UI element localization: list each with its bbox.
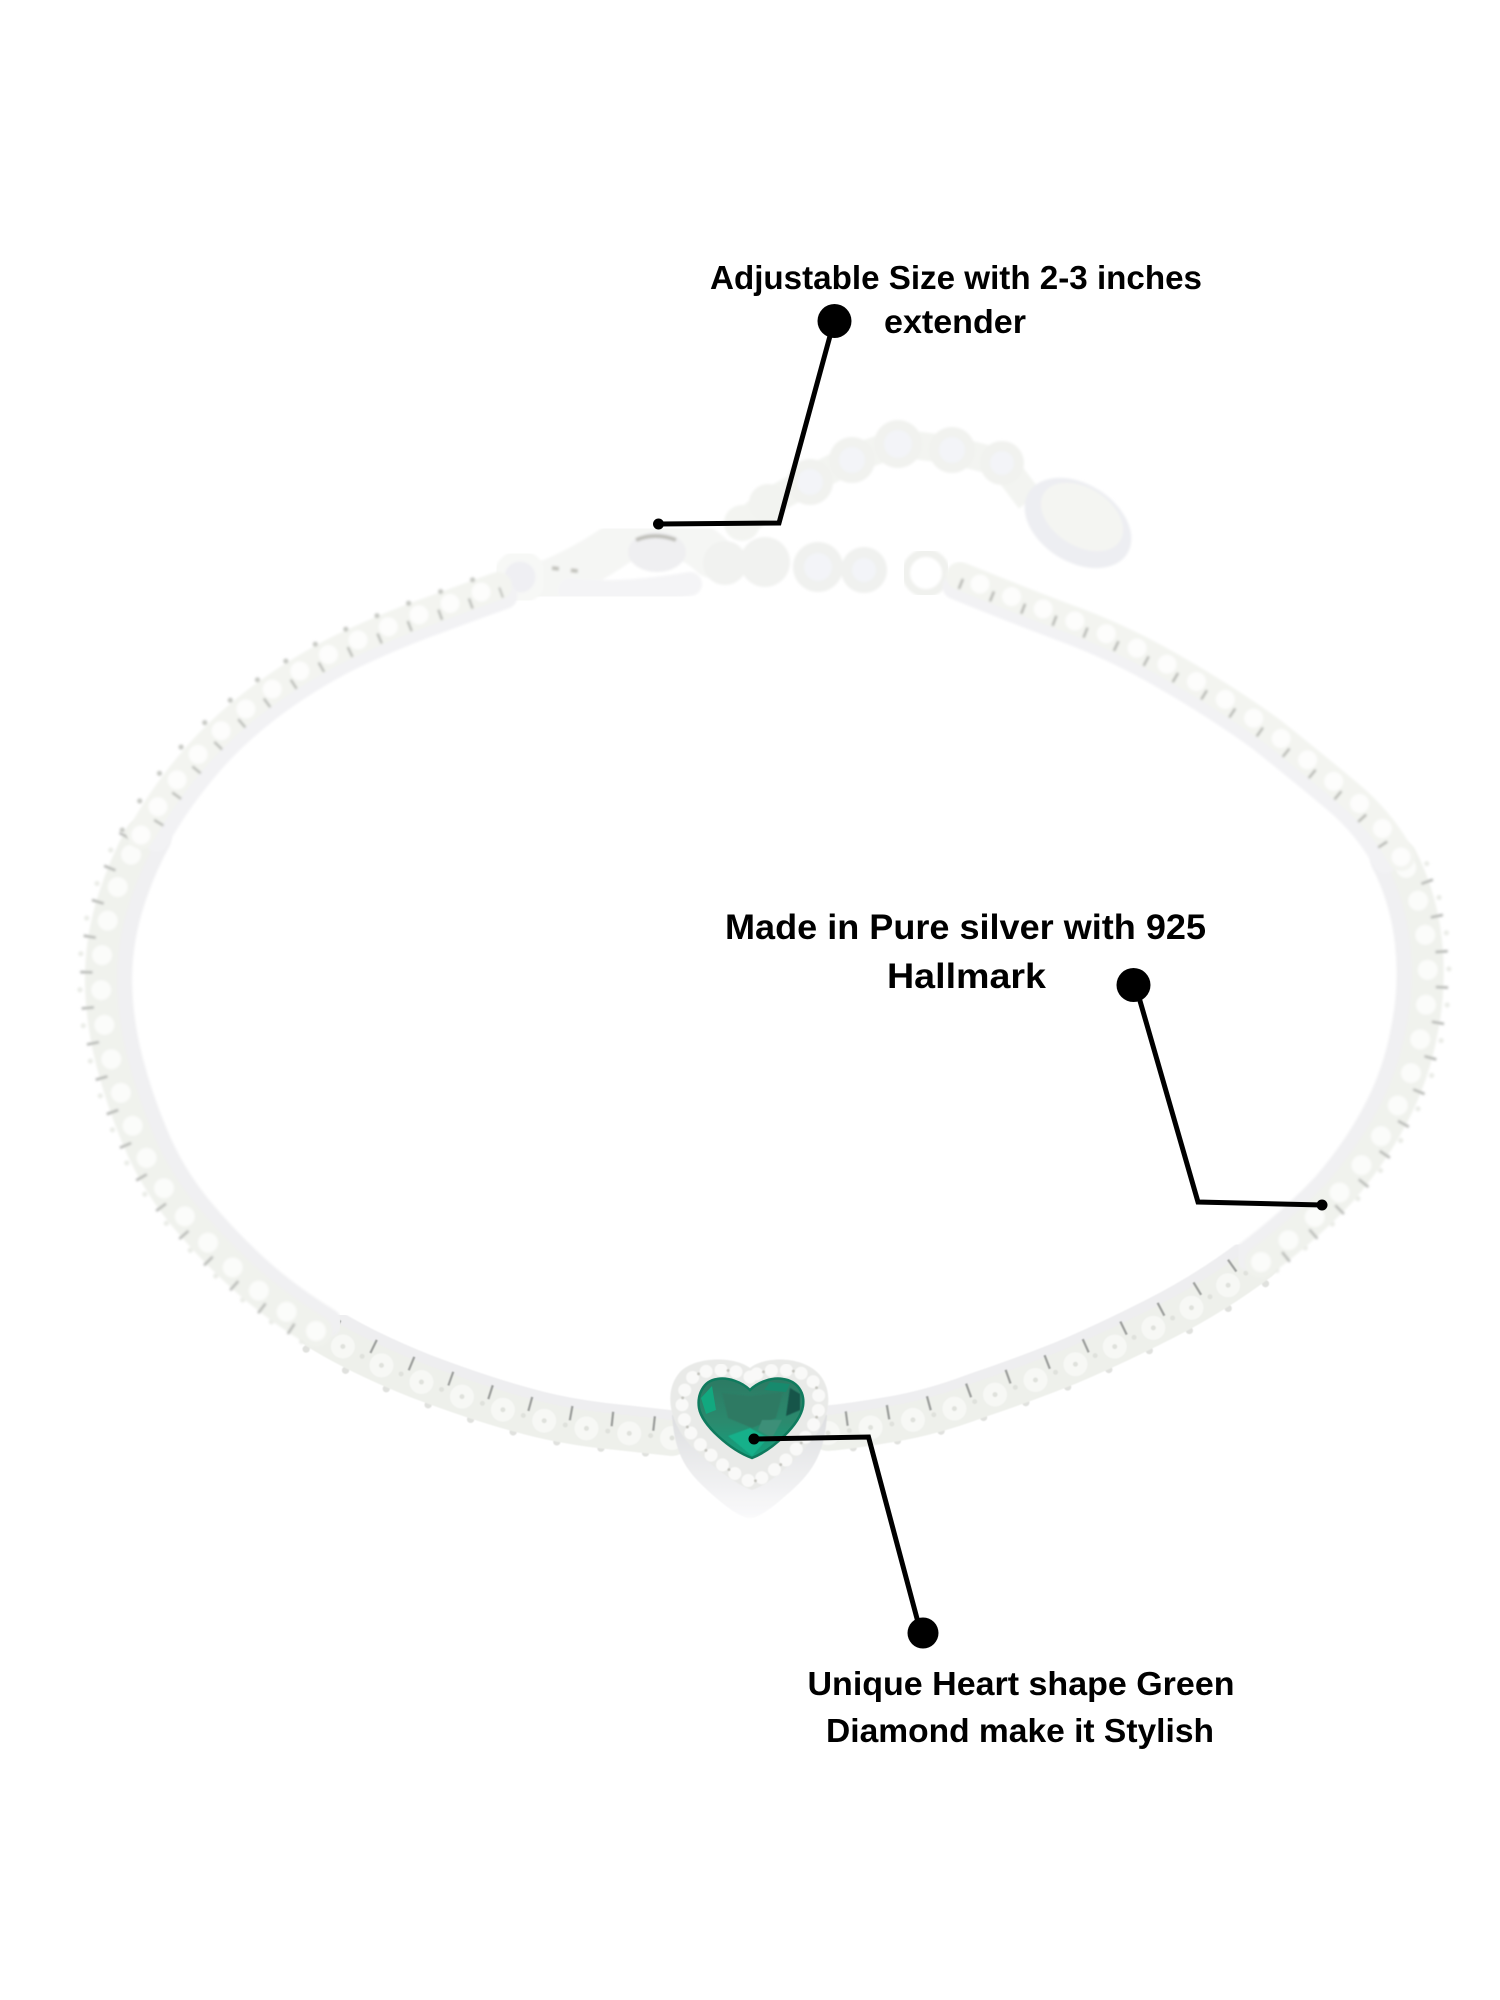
extender chain and tag [724, 420, 1148, 587]
heading: green diamond: Diamond make it Stylish [826, 1712, 1214, 1749]
pave stones [682, 1370, 819, 1482]
lobster clasp and lower chain [548, 532, 887, 593]
heading: adjustable size: Adjustable Size with 2-3 inches [710, 259, 1202, 296]
clasp ring [499, 556, 541, 598]
bracelet [80, 420, 1449, 1518]
heading: pure silver [725, 908, 1206, 996]
marker: green diamond [908, 1618, 938, 1648]
leader line: green diamond [753, 1437, 919, 1626]
left chain lower stones [298, 1322, 675, 1456]
callout: pure silver [725, 908, 1328, 1210]
right chain upper stones [955, 576, 1401, 861]
pave halo [670, 1359, 828, 1490]
heading: green diamond [808, 1665, 1234, 1749]
right chain lower stones [826, 1255, 1281, 1450]
silver heart body [672, 1415, 827, 1518]
callout: adjustable size [653, 259, 1202, 530]
marker: pure silver [1116, 968, 1150, 1002]
left chain side stones [80, 830, 327, 1342]
marker: adjustable size [818, 304, 852, 338]
heading: adjustable size [710, 259, 1202, 340]
heading: pure silver: Made in Pure silver with 925 [725, 908, 1206, 947]
jump ring [906, 553, 946, 593]
left chain upper stones [122, 574, 505, 839]
heart pendant [670, 1359, 828, 1518]
anchor: clasp [653, 518, 664, 530]
right tennis chain [826, 576, 1449, 1450]
heading: green diamond: Unique Heart shape Green [808, 1665, 1234, 1702]
anchor: heart stone [748, 1434, 760, 1444]
green heart stone [699, 1379, 803, 1458]
anchor: tennis chain [1316, 1200, 1328, 1210]
heading: pure silver: Hallmark [887, 957, 1047, 996]
leader line: adjustable size [658, 325, 833, 524]
heading: adjustable size: extender [884, 303, 1026, 340]
right chain side stones [1249, 852, 1449, 1270]
left tennis chain [80, 574, 675, 1456]
leader line: pure silver [1136, 987, 1322, 1205]
callout: green diamond [748, 1434, 1234, 1749]
